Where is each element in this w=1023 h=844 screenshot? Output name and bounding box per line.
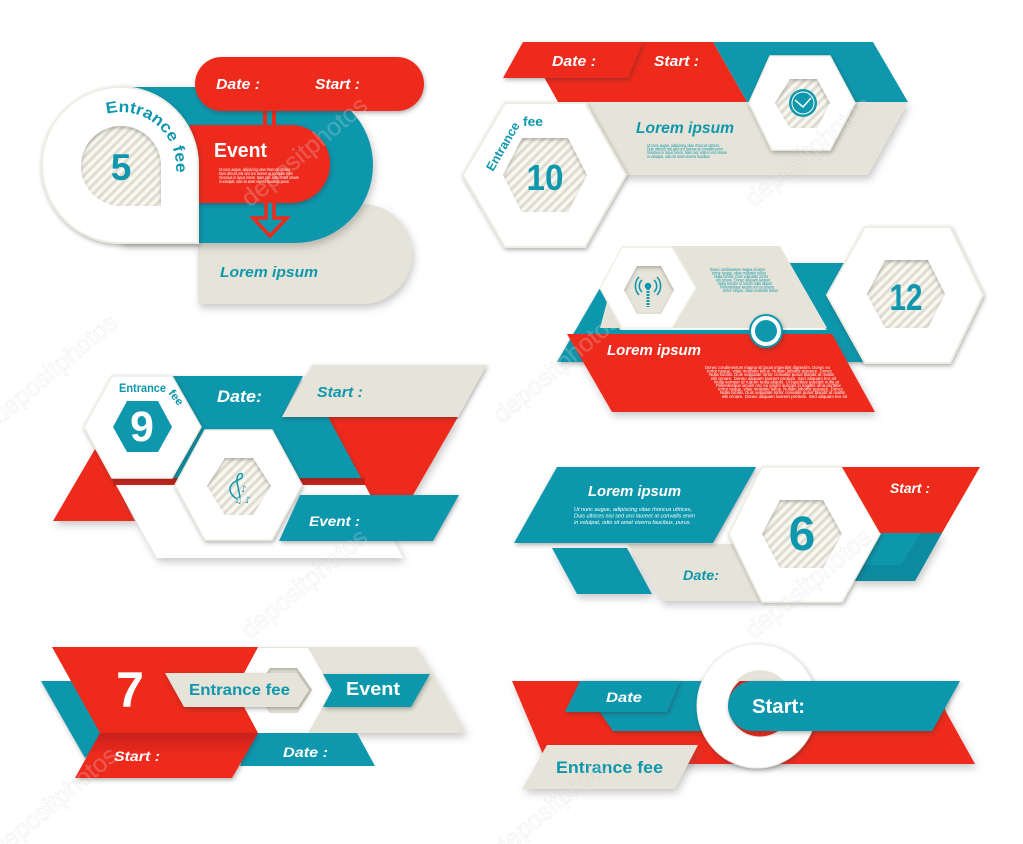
red body text: elit ornare. Donec aliquam laoreet pretium. Sed aliquam leo sit [722,394,848,399]
number 7: 7 [116,662,144,718]
hexagon inset [255,668,312,713]
body text: Vivamus in lacus lorem. Nam nec ante in est ornare [647,150,728,155]
entrance fee label: Entrance fee [556,758,663,777]
teal lorem panel [514,467,756,543]
watermarks: depositphotos [236,523,373,645]
date label: Date : [216,76,260,93]
music hexagon [175,430,302,540]
lorem ipsum label: Lorem ipsum [636,120,734,137]
red date bar [195,57,424,111]
red body text: Nulla facilisi. Duis vulputate tortor convallis purus blandit at mattis [720,390,845,395]
red start panel [842,467,980,533]
panel: entrance fee 9 [53,365,487,558]
body text: Ut nunc augue, adipiscing vitae rhoncus ultrices, [647,143,720,148]
lorem ipsum label: Lorem ipsum [607,342,701,359]
date label: Date: [217,387,262,406]
node circle [749,314,783,348]
date tag [565,681,680,712]
teal event tag [279,495,459,541]
big hexagon [827,227,983,363]
red body text: Nulla semper id rutrum nulla aliquet. Ut faucibus suscipit nulla at [714,379,840,384]
icon: clock [789,89,817,117]
teal start banner [728,681,960,731]
red body text: tortor neque, vitae molestie tellus. Nullam lobortis posuere. Donec [718,387,843,392]
start label: Start : [890,480,930,496]
teal mid panel [580,681,710,731]
watermarks: depositphotos [740,91,877,213]
antenna inset [624,266,674,314]
red top [523,42,747,102]
lorem ipsum label: Lorem ipsum [220,264,318,281]
event text: Duis ultrices nisi sed orci laoreet at convallis enim [219,171,293,176]
body text: in volutpat, odio sit amet viverra faucibus, purus. [574,520,691,526]
watermarks: depositphotos [236,91,373,213]
icon: music notes: ♪ [241,485,247,495]
teal right tag [853,533,942,581]
red body text [705,365,848,399]
red right trapezoid [328,417,458,495]
white ring [697,644,817,768]
beige body text: tortor neque, vitae molestie tellus [723,288,778,293]
hexagon 6 [729,467,880,602]
beige body text: Nulla semper id rutrum nulla aliquet [718,281,773,286]
red body text: Pellentesque iaculis orci eu ipsum suscipit in sagittis urna porttitor [716,383,842,388]
red ribbon [512,681,975,764]
start label: Start : [114,748,160,764]
big hexagon [463,103,626,247]
watermarks: depositphotos [488,307,625,429]
beige date panel [628,544,760,601]
entrance fee tag [522,745,698,789]
number 6: 6 [789,508,815,561]
icon: music notes: ♪ [245,496,251,506]
start label: Start : [315,76,360,93]
panel: entrance fee 12 [557,227,983,412]
red triangle [53,449,135,521]
teal lower-left tag [552,548,652,594]
lorem ipsum label: Lorem ipsum [588,484,681,500]
start label: Start: [752,696,805,718]
big hexagon inset [867,260,945,328]
entrance fee label: Entrance fee [189,682,290,699]
teal back shape [557,263,865,362]
event text [219,167,300,184]
watermarks: depositphotos [740,523,877,645]
number 10: 10 [526,157,564,198]
entrance label: Entrance [119,383,166,395]
date label: Date : [552,53,596,70]
curved entrance fee: Entrance fee [106,101,186,172]
event tag [323,674,430,707]
teal panel [173,376,361,478]
number 9: 9 [130,403,154,451]
event label: Event : [309,513,360,529]
beige body text [710,267,778,293]
red main panel [52,647,258,733]
teal top [713,42,908,102]
hexagon 6 inset [762,500,842,568]
red band [113,478,365,486]
date label: Date [606,689,642,705]
music inset [207,458,271,515]
white lower strip [116,485,403,558]
clock hexagon [749,56,855,150]
beige body text: Pellentesque iaculis orci eu ipsum [720,284,774,290]
beige body text: tortor neque, vitae molestie tellus [712,270,766,276]
panel: entrance fee 10 [463,42,908,247]
teal date tag [240,733,375,766]
icon: music notes [230,473,251,506]
red panel [567,334,875,412]
beige start tag [282,365,487,417]
teal rounded panel [120,87,373,243]
antenna hexagon [600,247,696,328]
event text: Ut nunc augue, adipiscing vitae rhoncus ultrices, [219,167,291,172]
watermarks [0,91,877,844]
connector [263,111,276,125]
icon: antenna [635,277,661,307]
event label: Event [346,679,400,699]
body text: in volutpat, odio sit amet viverra faucibus [647,154,710,159]
fee label: fee [523,115,543,129]
red date tag [503,42,643,78]
arrow [253,203,287,236]
beige panel [600,246,827,328]
beige body text: elit ornare. Donec aliquam laoreet [716,278,771,282]
red body text: Nulla facilisi. Duis vulputate tortor convallis purus blandit at mattis [709,372,834,377]
entrance fee tag [165,673,309,707]
teardrop inset [81,126,161,206]
start label: Start : [654,53,699,70]
hexagon [235,648,332,733]
beige back panel [250,647,466,733]
teal left wing [41,681,115,758]
clock inset [775,79,830,128]
panel: entrance fee 5 [39,56,428,312]
event text: Vivamus in lacus lorem. Nam nec ante in est ornare [219,175,300,180]
body text [574,507,695,526]
number 12: 12 [890,277,922,318]
start label: Start : [317,385,363,401]
beige panel [587,102,908,175]
fee label: fee [166,387,186,408]
body text [647,143,728,159]
teal inner hexagon [113,401,172,452]
hexagon 9 [84,376,201,478]
event text: in volutpat, odio sit amet viverra faucibus purus [219,179,289,184]
number 5: 5 [111,147,131,188]
teal right shade [853,533,942,581]
date label: Date : [283,744,328,760]
panel: entrance fee 6 [514,467,980,602]
entrance label: Entrance [483,120,523,174]
beige body text: Nulla facilisi. Duis vulputate tortor [714,274,769,279]
beige lorem ipsum panel [198,204,412,304]
icon: music notes: ♫ [234,496,242,506]
body text: Duis ultrices nisi sed orci laoreet at convallis enim [647,146,723,152]
red body text: elit ornare. Donec aliquam laoreet pretium. Sed aliquam leo sit [711,376,837,381]
red event panel [190,125,330,203]
event heading: Event [214,140,267,162]
beige body text: Donec condimentum magna sit amet [710,267,766,272]
ring hole beige top [736,670,784,681]
red body text: tortor neque, vitae molestie tellus. Nullam lobortis posuere. Donec [707,369,832,374]
white teardrop [42,87,198,243]
big hexagon inset [503,138,587,212]
red lower tag [75,733,258,778]
red body text: Donec condimentum magna sit lacus imperdiet dignissim. Donec eu [705,365,831,370]
body text: Duis ultrices nisi sed orci laoreet at convallis enim [574,514,695,520]
panel: start ring [512,644,975,789]
body text: Ut nunc augue, adipiscing vitae rhoncus ultrices, [574,507,692,513]
panel: entrance fee 7 [41,647,466,778]
date label: Date: [683,567,719,583]
